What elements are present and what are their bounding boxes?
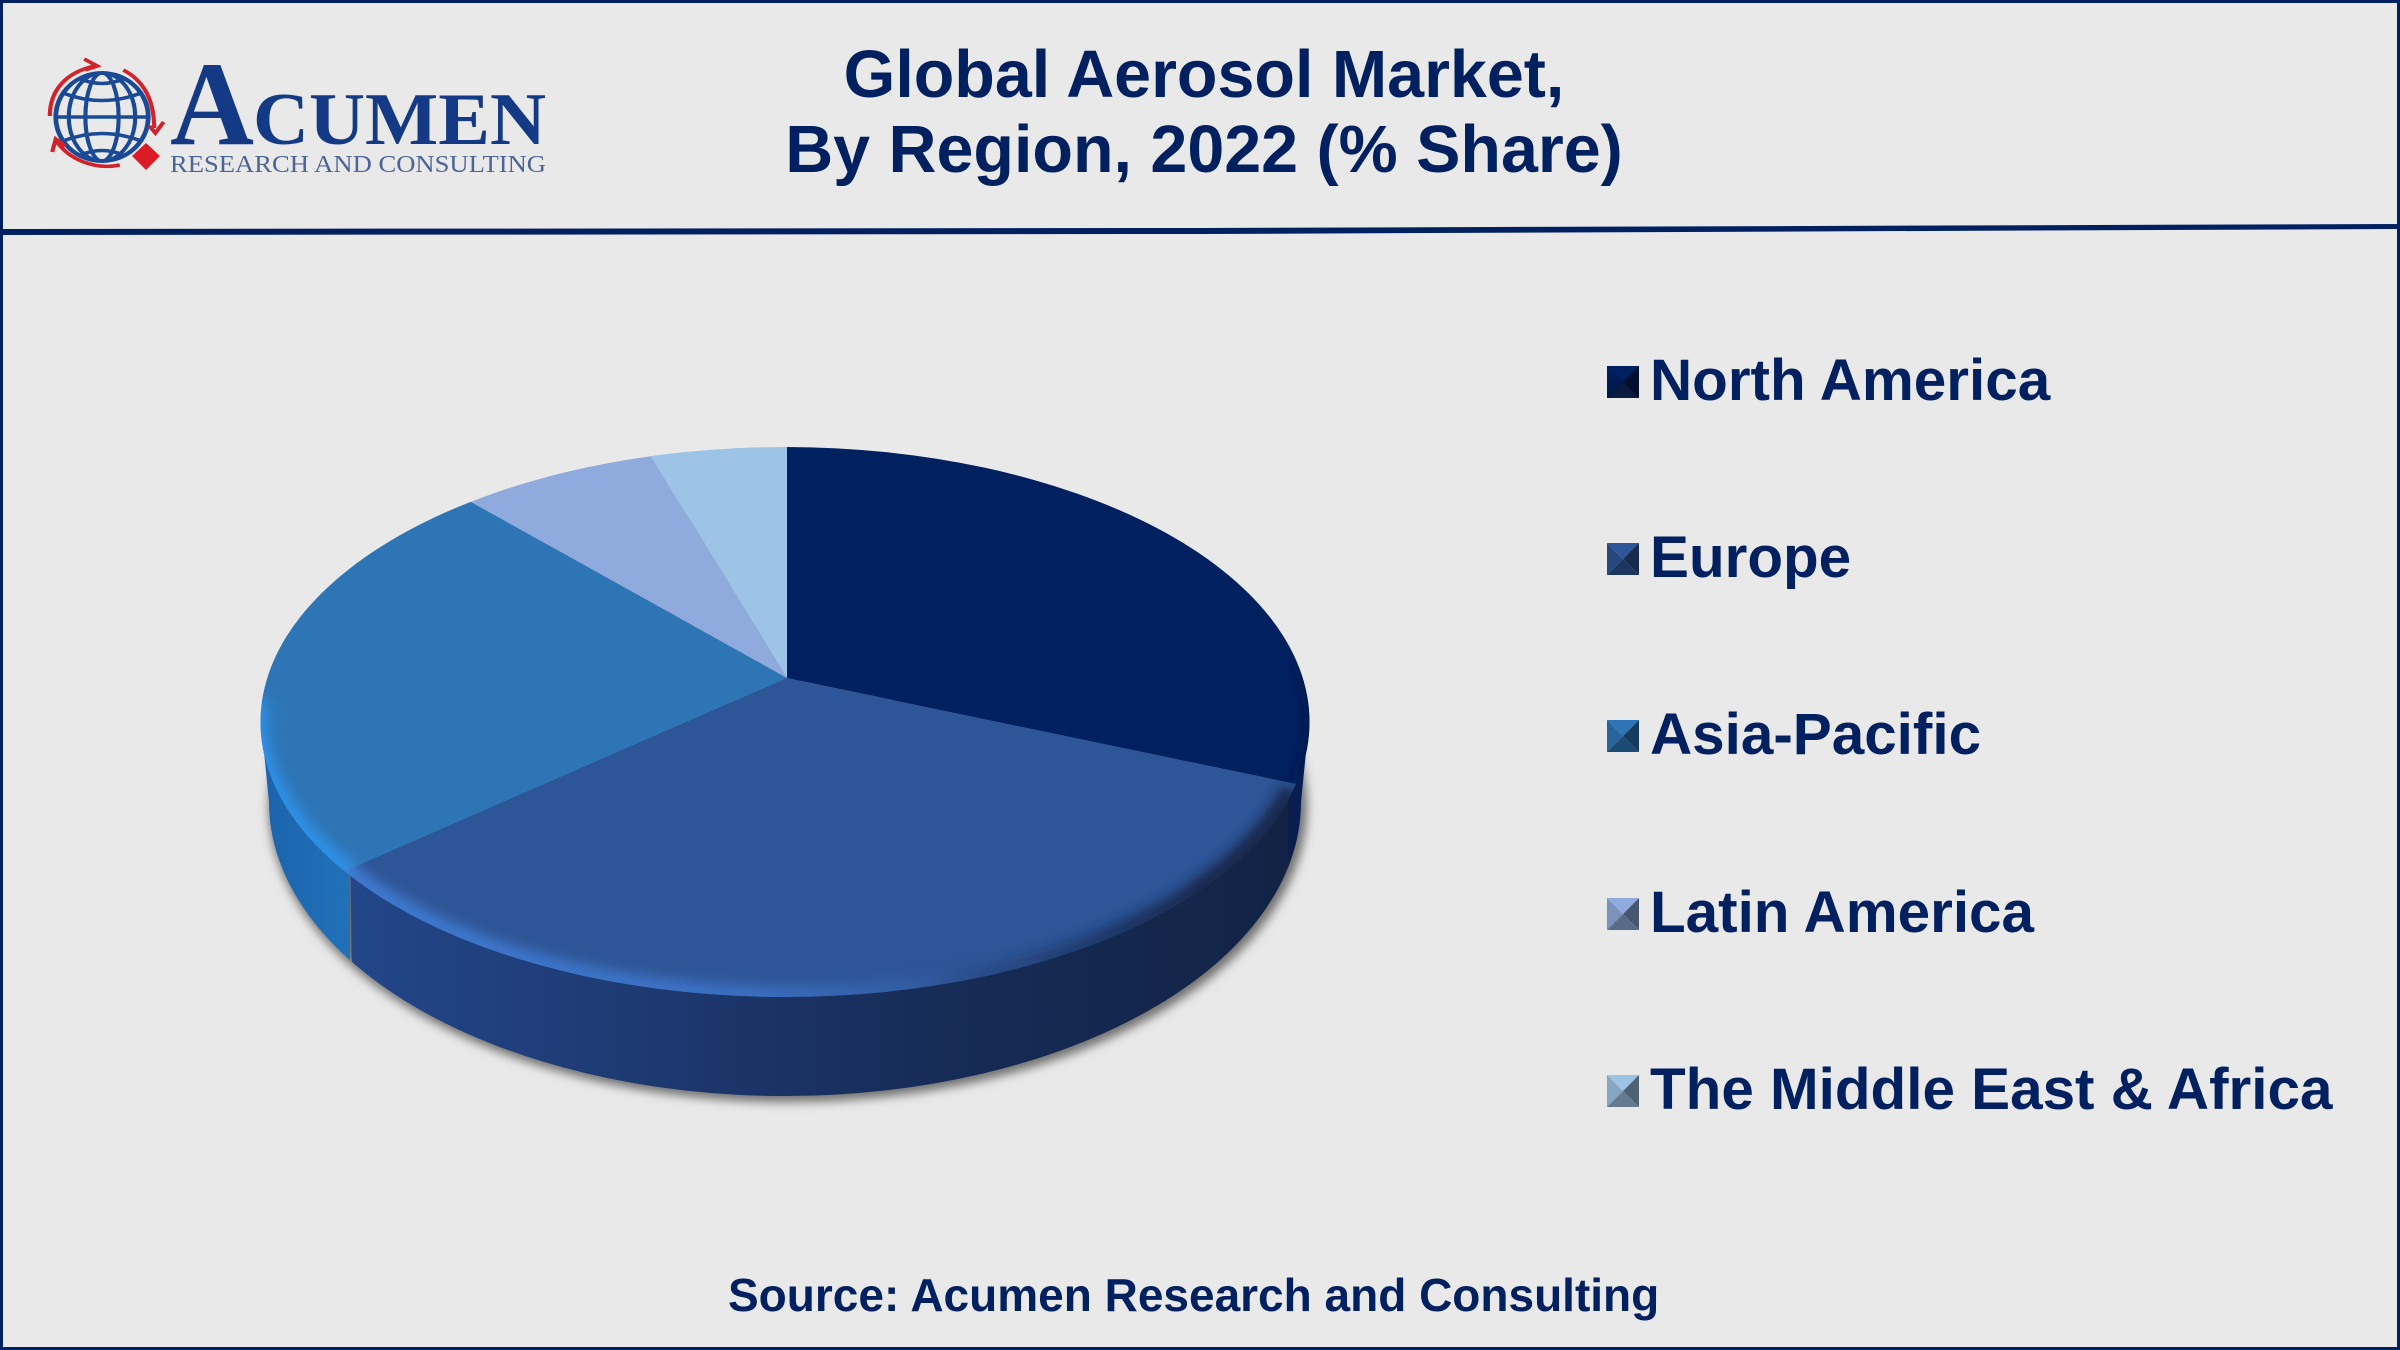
slice: The Middle East & Africa bbox=[641, 440, 787, 678]
legend item: The Middle East & Africa: The Middle East & Africa bbox=[1650, 1057, 2333, 1122]
legend item: Asia-Pacific: Asia-Pacific bbox=[1650, 702, 1981, 767]
rim highlights bbox=[257, 660, 1313, 996]
title bbox=[785, 38, 1623, 187]
source note: Source: Acumen Research and Consulting bbox=[728, 1269, 1659, 1321]
chart: 3D pie bbox=[260, 447, 1314, 1109]
slice: North America bbox=[787, 447, 1310, 784]
title: By Region, 2022 (% Share) bbox=[785, 113, 1623, 187]
slice: Europe bbox=[345, 678, 1296, 997]
pie top slices bbox=[260, 447, 1310, 997]
logo: Acumen Research and Consulting bbox=[50, 37, 546, 178]
title: Global Aerosol Market, bbox=[844, 38, 1564, 112]
logo: Acumen Research and Consulting: CUMEN bbox=[253, 79, 546, 161]
legend bbox=[1607, 348, 2333, 1122]
legend item: North America: North America bbox=[1650, 348, 2051, 413]
slice: Latin America bbox=[470, 456, 787, 678]
legend item: Latin America: Latin America bbox=[1650, 880, 2035, 945]
pie shadow bbox=[269, 510, 1307, 1102]
icon: red arrows bbox=[50, 59, 164, 166]
logo tagline: RESEARCH AND CONSULTING bbox=[170, 152, 546, 178]
icon: red diamond bbox=[132, 143, 160, 170]
pie side walls bbox=[240, 700, 1328, 1120]
legend item: Europe: Europe bbox=[1650, 525, 1851, 590]
header divider bbox=[0, 224, 2400, 235]
icon: globe bbox=[56, 73, 148, 161]
logo wordmark: A bbox=[170, 37, 254, 170]
slice: Asia-Pacific bbox=[260, 502, 786, 868]
